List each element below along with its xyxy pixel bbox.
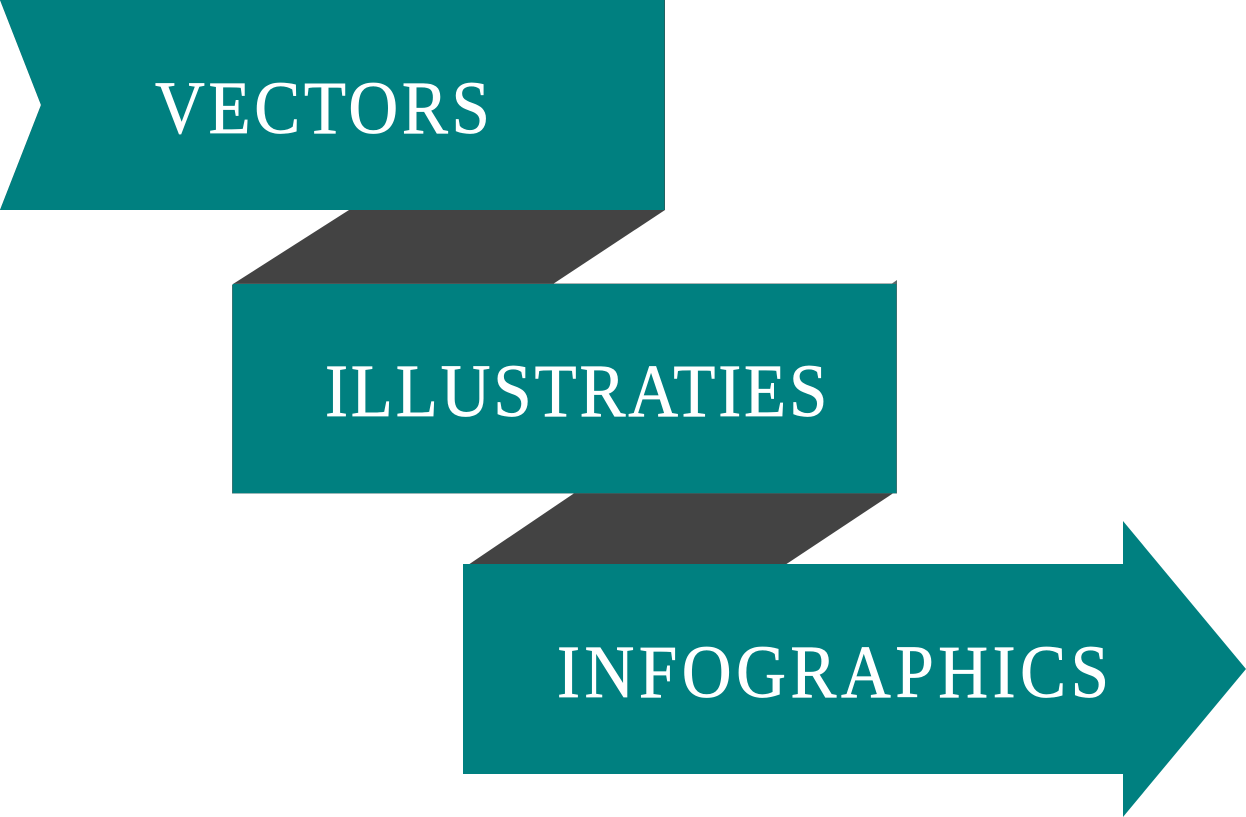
banner: vectors: [0, 0, 665, 210]
fold: lower dark connector: [468, 492, 895, 565]
label: infographics: INFOGRAPHICS: [557, 630, 1109, 714]
fold: upper dark connector: [233, 210, 665, 284]
label: illustraties: ILLUSTRATIES: [325, 349, 827, 433]
arrow banner: infographics: [463, 521, 1246, 817]
label: vectors: VECTORS: [155, 66, 490, 150]
banner: illustraties: [232, 280, 897, 494]
